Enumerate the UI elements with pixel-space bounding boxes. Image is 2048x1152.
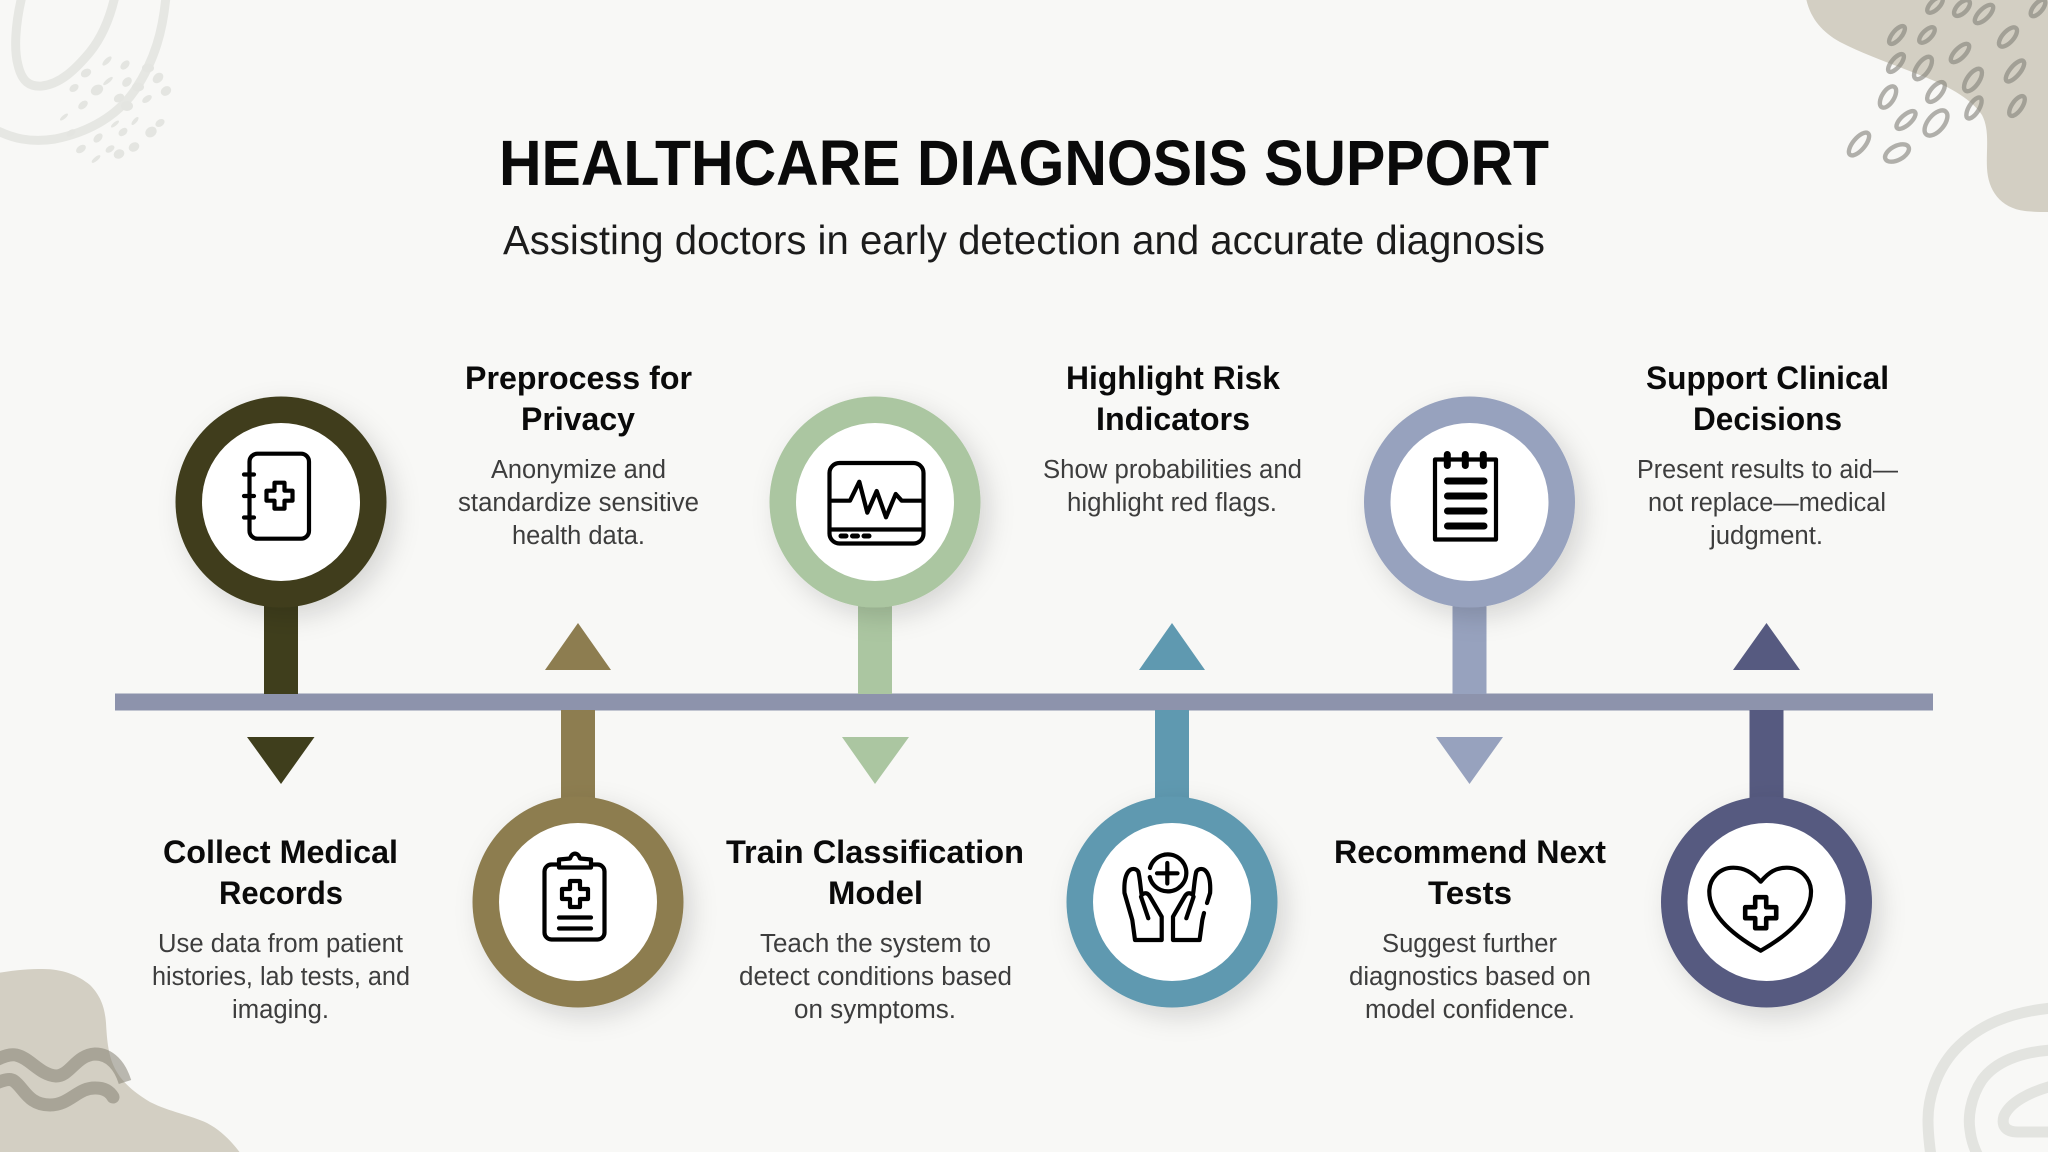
description [1349, 930, 1591, 1024]
description: Anonymize and [491, 456, 666, 484]
heading: Records [219, 875, 343, 911]
timeline bar [115, 694, 1933, 710]
description [1043, 456, 1302, 517]
heading: Train Classification [726, 834, 1024, 870]
heading [163, 834, 398, 911]
arrow: up [1139, 623, 1205, 670]
step 6: Support Clinical Decisions [1637, 360, 1898, 1008]
stem and ring [472, 710, 684, 1008]
description: detect conditions based [739, 963, 1012, 991]
step 2: Preprocess for Privacy [458, 360, 699, 1008]
description: Present results to aid— [1637, 456, 1898, 484]
decoration: bottom-right concentric lines [1928, 1008, 2048, 1152]
arrow: up [1733, 623, 1800, 670]
title: HEALTHCARE DIAGNOSIS SUPPORT [499, 127, 1549, 199]
step 4: Highlight Risk Indicators [1043, 360, 1302, 1008]
heading: Support Clinical [1646, 360, 1889, 396]
description: on symptoms. [794, 996, 956, 1024]
heading [1646, 360, 1889, 437]
heading: Preprocess for [465, 360, 692, 396]
heading [726, 834, 1024, 911]
description: model confidence. [1365, 996, 1575, 1024]
step 3: Train Classification Model [726, 396, 1024, 1024]
icon: clipboard with cross [544, 854, 604, 940]
description: Show probabilities and [1043, 456, 1302, 484]
description: diagnostics based on [1349, 963, 1591, 991]
description: imaging. [232, 996, 329, 1024]
heading: Model [828, 875, 923, 911]
description [1637, 456, 1898, 550]
decoration: top-right blob with rings [1806, 0, 2048, 212]
decoration: top-left line loops and dots [0, 0, 173, 164]
arrow: up [545, 623, 611, 670]
stem and ring [1364, 396, 1575, 694]
icon: notepad [1435, 454, 1496, 540]
heading: Tests [1428, 875, 1512, 911]
description: histories, lab tests, and [152, 963, 410, 991]
decoration: bottom-left blob with waves [0, 969, 241, 1152]
heading: Collect Medical [163, 834, 398, 870]
description: health data. [512, 522, 645, 550]
heading: Indicators [1096, 401, 1250, 437]
icon: heart with cross [1709, 868, 1811, 951]
step 1: Collect Medical Records [152, 396, 410, 1024]
description: Suggest further [1382, 930, 1558, 958]
subtitle: Assisting doctors in early detection and accurate diagnosis [503, 217, 1545, 263]
icon: hands holding medical cross [1124, 854, 1210, 940]
description: Teach the system to [760, 930, 991, 958]
stem and ring [176, 396, 386, 694]
heading: Recommend Next [1334, 834, 1606, 870]
heading [1066, 360, 1280, 437]
description [739, 930, 1012, 1024]
description: highlight red flags. [1067, 489, 1277, 517]
heading: Highlight Risk [1066, 360, 1280, 396]
heading: Decisions [1693, 401, 1842, 437]
arrow: down [247, 737, 314, 784]
arrow: down [1436, 737, 1503, 784]
step 5: Recommend Next Tests [1334, 396, 1606, 1024]
icon: heart-rate monitor [830, 463, 924, 544]
description [458, 456, 699, 550]
description: judgment. [1709, 522, 1823, 550]
description: not replace—medical [1648, 489, 1886, 517]
description: standardize sensitive [458, 489, 699, 517]
heading: Privacy [521, 401, 635, 437]
heading [465, 360, 692, 437]
arrow: down [842, 737, 909, 784]
description: Use data from patient [158, 930, 403, 958]
stem and ring [1066, 710, 1278, 1008]
icon: medical notebook [244, 454, 309, 539]
heading [1334, 834, 1606, 911]
stem and ring [1661, 710, 1872, 1008]
stem and ring [770, 396, 980, 694]
description [152, 930, 410, 1024]
